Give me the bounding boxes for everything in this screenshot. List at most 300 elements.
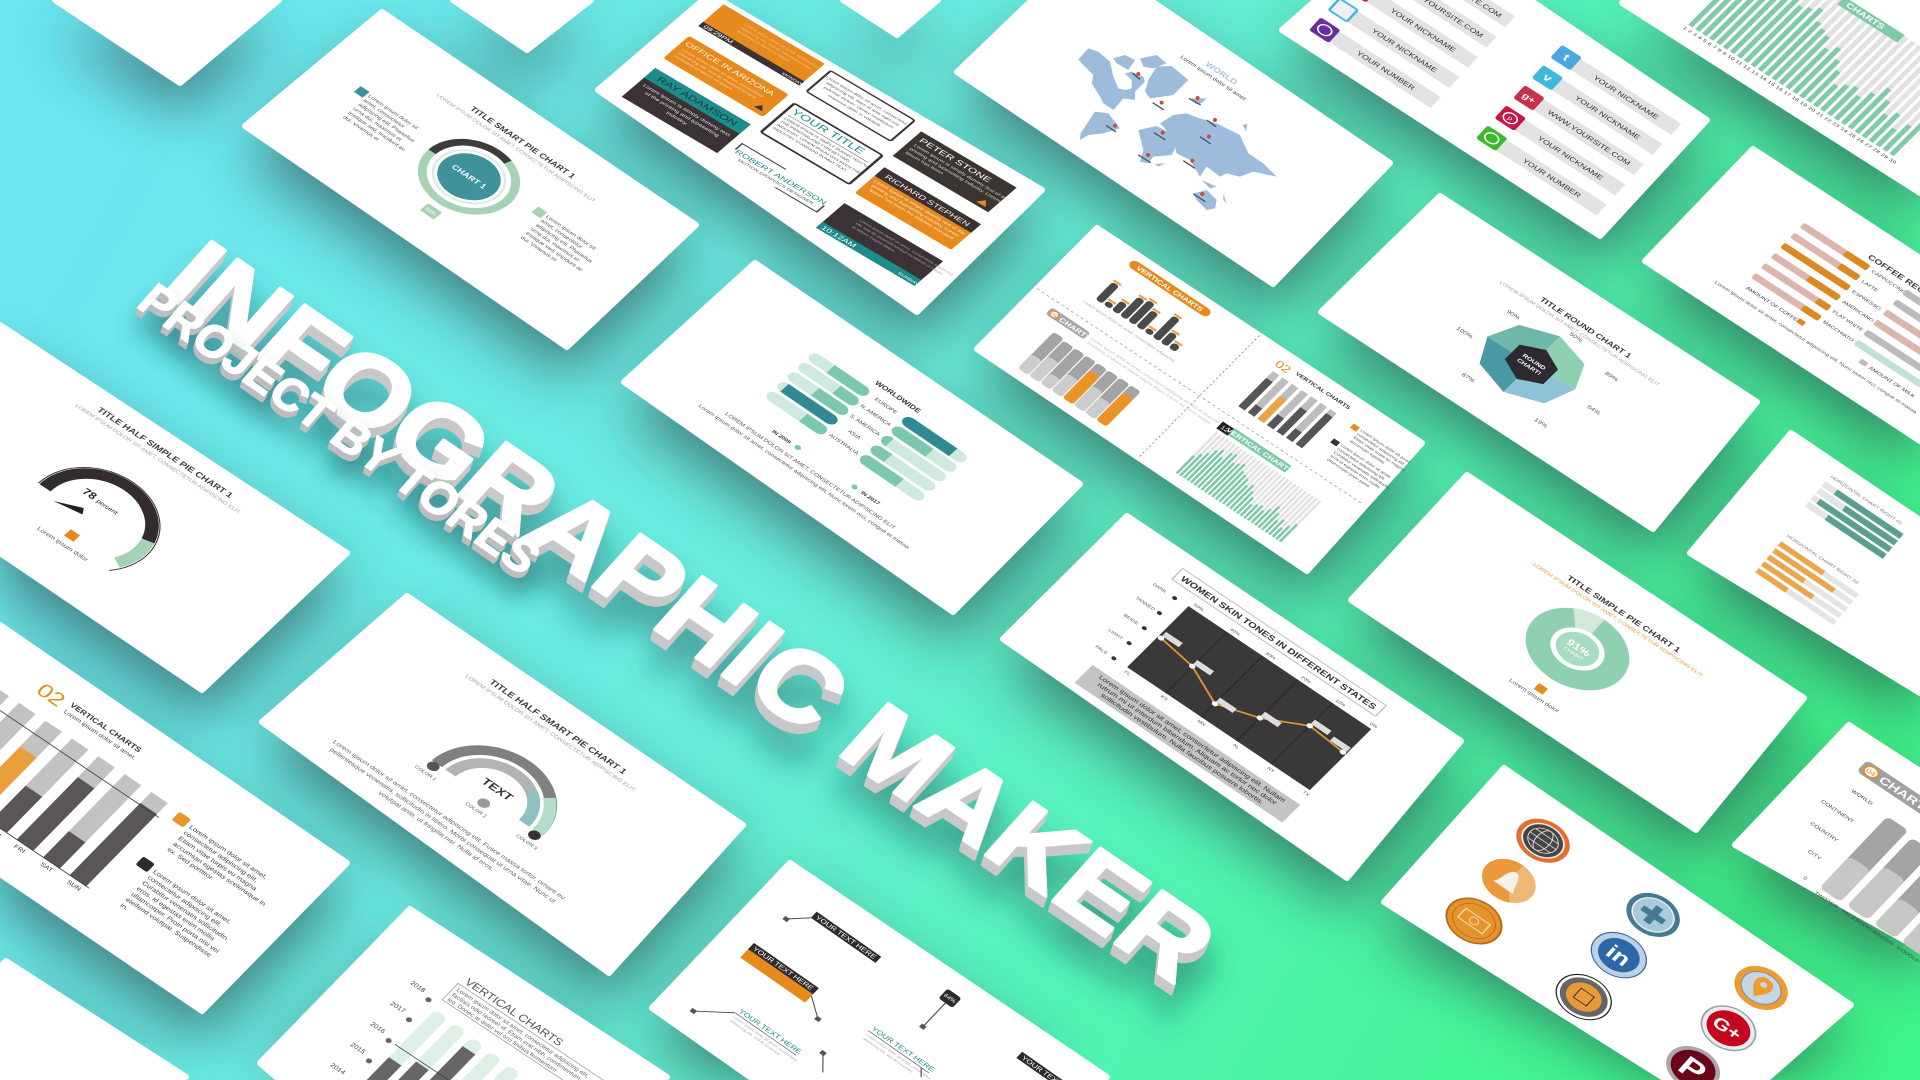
title: infographic maker: INFOGRAPHIC MAKER [143, 220, 1238, 1001]
callout: teal text 2: adipiscing elit, sed do eiusmod [862, 1036, 914, 1073]
text block left [330, 86, 428, 157]
subheading: LOREM IPSUM DOLOR SIT AMET, CONSECTETUR ADIPISCING ELIT. [463, 674, 637, 793]
contact icon: empty box [1329, 0, 1358, 22]
card: office in Arizona: incididunt ut labore et dolore [673, 54, 734, 91]
quadrant: 02 vertical charts: Curabitur venenatis sollicitudin [1333, 450, 1391, 490]
text block right [508, 207, 605, 277]
card: your title: THE PRINTING AND TYPESETTING [779, 120, 851, 163]
quadrant: 12 vertical charts [1174, 421, 1331, 542]
quadrant: 02 vertical charts: accumsan egestas [1349, 439, 1387, 465]
quadrant: 04 charts: incididunt ut labore et dolore magna aliqua ut enim ad minim veniam [1086, 341, 1212, 425]
axes labels: 40% [1228, 627, 1242, 638]
contact icon: pinterest [1494, 105, 1526, 131]
panel: round chart [1321, 196, 1757, 529]
year labels [328, 980, 427, 1076]
round chart: CHART! [1515, 358, 1542, 377]
callout: teal text 1: Lorem ipsum dolor sit amet, consectetur [732, 1015, 800, 1063]
description text: LOREM IPSUM DOLOR SIT AMET, CONSECTETUR ADIPISCING ELIT [723, 412, 897, 531]
callout: teal text 1 [728, 1007, 807, 1067]
callout: black label 1: YOUR TEXT HERE [814, 914, 878, 961]
heading: VERTICAL CHARTS [462, 976, 566, 1049]
card: your title: YOUR TITLE [789, 107, 868, 156]
subheading: Lorem ipsum dolor sit amet. [62, 709, 137, 761]
description box: Lorem ipsum dolor sit amet, consectetur adipiscing elit. Nullam [1097, 674, 1288, 804]
donut chart: CHART [1562, 646, 1584, 662]
card: quote box [807, 71, 915, 141]
panel: women skin tones chart [1003, 516, 1461, 878]
contact labels: YOUR NUMBER [1521, 157, 1583, 199]
axes labels: KS [1159, 694, 1170, 703]
axes labels: BEIGE [1122, 613, 1140, 627]
legend orange: Etiam vitae turpis eu magna [176, 836, 258, 892]
year markers [365, 996, 433, 1064]
card: Richard Stephen: RICHARD STEPHEN [883, 173, 972, 228]
panel: text flow callouts [652, 863, 1107, 1080]
card: your title: INDUSTRY. LOREM IPSUM HAS BEEN THE [776, 123, 862, 175]
card: quote box: adipiscing elit. Nam id ante eget nisi [825, 81, 901, 127]
icon: money [1436, 889, 1512, 953]
card: Richard Stephen [855, 167, 981, 250]
donut chart: 91% [1564, 638, 1592, 659]
heading: WORLD [1204, 60, 1240, 86]
panel: horizontal charts [1690, 433, 1920, 693]
card: 09:29PM: adipiscing elit, sed do eiusmod tempor [740, 26, 814, 71]
panel: blank slide bottom left [0, 961, 186, 1077]
stacked bars [0, 678, 171, 888]
region labels: N. AMERICA [859, 404, 892, 428]
text block right: urna dui, maximus et [529, 227, 581, 263]
axes labels: LIGHT [1107, 628, 1124, 641]
card: your title: LOREM IPSUM IS SIMPLY DUMMY TEXT OF [783, 117, 872, 170]
text block right: adipiscing elit. Phasellus [534, 223, 594, 264]
card: 10:12AM: SUNDAY [896, 271, 921, 287]
icon: google plus [1691, 997, 1766, 1060]
day labels [0, 772, 82, 893]
icon: globe [1506, 810, 1580, 872]
description text: Lorem ipsum dolor sit amet, consectetur adipiscing elit. Nunc lorem orci, congue et massa [697, 404, 911, 551]
heading pill [1856, 760, 1920, 841]
legend dark: in. [118, 903, 129, 912]
text block right: Lorem ipsum dolor sit [544, 215, 597, 251]
panel: coffee recipe [1645, 149, 1920, 441]
quadrant: 02 vertical charts: ullamcorper proin porta [1326, 457, 1371, 488]
description box: facilisis odio laoreet id. Etiam erat nibh, condimentum [450, 992, 582, 1080]
year labels: 2014 [328, 1062, 347, 1076]
subheading: LOREM IPSUM DOLOR SIT AMET, CONSECTETUR ADIPISCING ELIT [1531, 563, 1704, 678]
legend orange: consectetur adipiscing elit, [182, 830, 259, 884]
subheading: LOREM IPSUM DOLOR SIT AMET, CONSECTETUR ADIPISCING ELIT. [74, 404, 242, 516]
drink labels: LATTE [1860, 280, 1879, 294]
day labels: SAT [38, 862, 54, 874]
quadrant: 02 vertical charts: 02 [1272, 358, 1294, 376]
card: Richard Stephen: Ipsum has been the industry standard [868, 188, 955, 241]
gauge chart [13, 446, 187, 579]
heading box: WOMEN SKIN TONES IN DIFFERENT STATES [1178, 575, 1379, 712]
contact icon: pinterest: p [1506, 115, 1514, 122]
card: 10:12AM: et dolore magna aliqua [851, 225, 897, 253]
legend dark: ullamcorper. Proin porta nisi vel [129, 892, 221, 955]
colour keys: COLOR 2 [463, 802, 488, 819]
contact icon: twitter [1550, 45, 1582, 70]
percent labels: 19% [1532, 417, 1549, 429]
axis labels: 1 2 3 4 5 6 7 8 9 10 11 12 13 14 15 16 17 18 19 20 21 22 23 24 25 26 27 28 29 30 [1681, 26, 1897, 165]
green label: CHARTS [1844, 1, 1887, 31]
quadrant: orange vertical charts: Lorem ipsum dolor sit amet, consectetur adipiscing [1082, 299, 1177, 363]
subheading: Lorem ipsum dolor sit amet [1179, 55, 1247, 102]
callout: teal text 1: adipiscing elit, sed do eiusmod [729, 1018, 781, 1056]
quadrant: 12 vertical charts: VERTICAL CHARTS [1224, 426, 1295, 475]
x axis labels: FACEBOOK [1840, 909, 1872, 932]
panel: title smart pie chart [245, 12, 696, 347]
text block left: urna dui, maximus et [351, 107, 403, 143]
quadrant: 02 vertical charts: VERTICAL CHARTS [1294, 371, 1352, 411]
contact icon: viber [1309, 17, 1341, 43]
contact icon: whatsapp [1476, 125, 1508, 151]
caption: Lorem ipsum dolor [1507, 678, 1560, 714]
half ring gauge [437, 730, 576, 832]
percent labels: 64% [1585, 404, 1602, 416]
card: quote box: Lorem ipsum dolor sit amet, consectetur [825, 75, 909, 126]
x axis labels: TWITTER [1813, 891, 1839, 910]
legend [770, 429, 882, 506]
teal horizontal bars [1805, 481, 1904, 559]
card: Peter Stone: printing and typesetting industry. Lorem [908, 147, 1002, 204]
heading: TITLE ROUND CHART 1 [1538, 295, 1634, 360]
card: 10:12AM: elit, sed do eiusmod tempor incididunt ut labore [855, 222, 945, 276]
card: Peter Stone [893, 131, 1021, 215]
callout: 64% tag: 64% [942, 993, 957, 1005]
percentage tag: 60% [423, 207, 437, 217]
x axis labels [1813, 891, 1920, 966]
legend [1744, 285, 1917, 399]
subheading: LOREM IPSUM DOLOR SIT AMET, CONSECTETUR ADIPISCING ELIT [435, 93, 597, 204]
card: 09:29PM: 09:29PM [702, 25, 734, 45]
green label [1837, 0, 1905, 43]
panel: multi chart slide [977, 228, 1430, 571]
card: office in Arizona: adipiscing elit, sed do eiusmod tempor [677, 51, 758, 100]
round chart: ROUND [1521, 353, 1547, 372]
heading: TITLE SMART PIE CHART 1 [468, 105, 578, 180]
y axis labels [1768, 781, 1877, 881]
description box: rutrum mi ut interdum bibendum. Aliquam ac tortor nec dolor [1096, 681, 1280, 807]
heading: VERTICAL CHARTS [68, 701, 144, 754]
teal chart title: HORIZONTAL CHART RIGHT 01 [1829, 475, 1903, 526]
year labels: 2016 [368, 1021, 387, 1035]
connector 1 [782, 906, 811, 931]
subheading: LOREM IPSUM DOLOR SIT AMET, CONSECTETUR ADIPISCING ELIT [1498, 280, 1661, 388]
panel: blank slide top centre [843, 0, 938, 35]
percent labels: 50% [1567, 331, 1584, 344]
subtitle: project by tores: PROJECT BY TORES [128, 274, 551, 583]
contact labels: YOUR NUMBER [1355, 50, 1417, 92]
card: Peter Stone: Ipsum has been [904, 151, 944, 176]
panel: text cards [598, 0, 1047, 312]
donut chart: CHART 1 [450, 163, 489, 191]
percent labels: 90% [1505, 309, 1521, 321]
description box: leo. Donec at dolor vel orci finibus fermentum [445, 997, 558, 1073]
legend orange: ex. Sed porttitor. [165, 847, 215, 882]
day labels: FRI [12, 844, 26, 855]
region labels: ASIA [846, 429, 862, 441]
year labels: 2015 [348, 1042, 367, 1056]
quadrant: 04 charts: 04 [1050, 311, 1059, 319]
card: Robert Anderson: ROBERT ANDERSON [733, 148, 829, 206]
card: Ray Adamson: Lorem Ipsum is simply dummy text [641, 84, 731, 138]
heading: TITLE HALF SMART PIE CHART 1 [487, 678, 629, 776]
axes labels: DARK [1151, 582, 1168, 595]
tornado chart [764, 351, 970, 503]
icon: plus [1616, 884, 1690, 946]
card: quote box: maximus dolor in volutpat. [827, 94, 883, 128]
callout: 64% tag [938, 989, 962, 1008]
contact icon: magenta [1346, 0, 1378, 3]
y axis labels: WORLD [1850, 789, 1873, 806]
orange chart title: HORIZONTAL CHART RIGHT 02 [1785, 534, 1860, 586]
axes labels: AL [1231, 743, 1241, 750]
callout: teal text 2: Lorem ipsum dolor sit amet, consectetur [865, 1033, 933, 1080]
caption: Lorem ipsum dolor [35, 526, 90, 563]
connector 2 [799, 996, 831, 1022]
region labels: S. AMERICA [848, 414, 881, 437]
legend dark: eros, id egestas enim mollis [135, 886, 216, 942]
quadrant: 04 charts [1002, 307, 1236, 480]
panel: vertical charts left [0, 625, 347, 1011]
icon: linkedin [1581, 923, 1657, 987]
quadrant: 02 vertical charts: consectetur adipiscing elit [1336, 447, 1386, 481]
icon: linkedin: in [1601, 941, 1636, 970]
needle [54, 493, 87, 518]
panel: vertical charts bottom [260, 909, 667, 1080]
pale and dark bars [361, 1007, 525, 1080]
description box: sollicitudin vestibulum. Nulla faucibus posuere lobortis. [1099, 691, 1266, 806]
drink labels: FLAT WHITE [1831, 310, 1864, 333]
contact icon: twitter: t [1560, 52, 1573, 64]
card: Richard Stephen: printing and typesetting industry. Lorem [870, 184, 960, 238]
gauge centre text: TEXT [479, 776, 517, 803]
heading: WORLDWIDE [873, 379, 923, 415]
drink labels: MACCHIATO [1821, 320, 1855, 343]
year labels: 2017 [388, 1001, 407, 1015]
callout: orange card [740, 943, 819, 1003]
quadrant: 02 vertical charts: Lorem ipsum dolor sit amet [1359, 428, 1412, 464]
contact labels [1343, 0, 1669, 207]
legend orange [151, 812, 286, 913]
panel: blank slide top [453, 0, 591, 50]
text block left: Lorem ipsum dolor sit [366, 94, 419, 131]
contact labels: YOUR NICKNAME [1573, 94, 1642, 141]
day labels: SUN [65, 879, 82, 893]
quadrant: 04 charts: CHARTS [1057, 316, 1093, 342]
legend: IN 2009 [770, 430, 792, 445]
contact labels: WWW.YOURSITE.COM [1546, 109, 1632, 167]
percent labels [1428, 285, 1640, 446]
panel: half simple pie chart [0, 325, 347, 690]
colour keys: COLOR 1 [413, 765, 437, 782]
x axis labels: LINKEDIN [1868, 927, 1894, 947]
heading: TITLE SIMPLE PIE CHART 1 [1565, 574, 1683, 654]
axes labels: MN [1196, 719, 1207, 728]
contact icon: google plus [1513, 85, 1545, 111]
card: Ray Adamson: industry. [665, 111, 689, 127]
contact icon: vimeo [1532, 65, 1563, 91]
icon: location pin [1724, 957, 1798, 1019]
card: 10:12AM [816, 203, 959, 295]
callout: orange card: YOUR TEXT HERE [751, 945, 815, 992]
axes labels: 0% [1368, 722, 1379, 730]
axes labels: FL [1123, 670, 1132, 677]
orange horizontal bars [1755, 541, 1859, 625]
quadrant: 02 vertical charts [1235, 358, 1425, 499]
panel: blank slide top left [55, 0, 279, 83]
paragraph: pellentesque venenatis, sollicitudin in libero. Morbi consequat ut urna vitae. Nunc ut [328, 747, 557, 904]
paragraph: volutpat ante, ut fringilla nisi. Nulla id eros. [376, 790, 495, 872]
axes labels: TX [1301, 790, 1311, 798]
legend dark: Lorem ipsum dolor sit amet, [151, 869, 232, 925]
card: office in Arizona: Lorem ipsum dolor sit amet, consectetur [681, 48, 765, 99]
number: 02 [32, 679, 70, 711]
panel: simple pie chart [1351, 475, 1804, 830]
legend: IN 2017 [859, 491, 881, 506]
text block left: dui. Vivamus et [341, 115, 380, 142]
drink labels [1821, 270, 1907, 346]
card: 09:29PM: Lorem ipsum dolor sit amet, consectetur [743, 23, 821, 69]
quadrant: orange vertical charts: VERTICAL CHARTS [1134, 264, 1205, 313]
card: Ray Adamson [622, 68, 751, 153]
gauge value: 78 percent [80, 487, 122, 517]
year labels: 2018 [408, 980, 427, 994]
axes labels: PALE [1094, 645, 1109, 656]
percent labels: 89% [1603, 371, 1620, 383]
card: office in Arizona: OFFICE IN ARIZONA [683, 40, 778, 98]
panel: worldwide chart [624, 263, 1080, 612]
contact labels: YOUR NICKNAME [1389, 7, 1457, 54]
y axis labels: CONTINENT [1819, 799, 1855, 825]
y axis labels: COUNTRY [1809, 822, 1839, 843]
axes labels: 10% [1334, 698, 1347, 709]
percent labels: 100% [1455, 326, 1474, 340]
percent labels: 87% [1460, 372, 1476, 384]
region labels: AUSTRALIA [827, 433, 860, 456]
connector 4 [690, 993, 735, 1031]
text block left: tristique sed, tincidunt ac [346, 111, 406, 152]
text block right: amet, consectetur [539, 219, 584, 250]
card: your title [761, 103, 884, 185]
text block right: tristique sed, tincidunt ac [524, 231, 584, 273]
card: Peter Stone: PETER STONE [917, 137, 994, 184]
description box: Lorem ipsum dolor sit amet, consectetur adipiscing elit, [455, 987, 591, 1079]
colour keys [411, 756, 549, 853]
card: 10:12AM: 10:12AM [819, 225, 858, 249]
axes labels: TANNED [1134, 596, 1156, 612]
contact labels: YOUR NICKNAME [1370, 27, 1439, 74]
legend: AMOUNT OF MILK [1867, 366, 1916, 399]
axes labels: 30% [1264, 651, 1277, 662]
icon: bell [1472, 850, 1546, 912]
milk bars right [1853, 289, 1920, 388]
milk and coffee bars left [1751, 223, 1871, 321]
panel: world map [957, 0, 1390, 284]
panel: round icons [1384, 768, 1851, 1080]
bars [1819, 816, 1920, 956]
tag [1534, 683, 1548, 695]
legend orange: accumsan egestas scelerisque in [171, 841, 267, 908]
heading pill: 04 [1864, 767, 1878, 778]
column chart 30 values [1688, 0, 1920, 156]
text block left: adipiscing elit. Phasellus [356, 103, 416, 144]
icon: square [1546, 965, 1622, 1029]
donut chart [403, 128, 534, 226]
card: office in Arizona [663, 36, 789, 117]
y axis labels: CITY [1806, 849, 1822, 861]
world map [1078, 48, 1277, 210]
legend orange: Lorem ipsum dolor sit amet, [187, 825, 268, 881]
panel: top right green bars [1622, 0, 1920, 193]
text block right: dui. Vivamus et [519, 236, 558, 263]
card: 09:29PM: MONDAY [781, 72, 804, 86]
quadrant: 04 charts: Lorem ipsum dolor sit amet, consectetur adipiscing elit sed do eiusmod tempor [1090, 337, 1235, 434]
colour keys: COLOR 3 [514, 834, 539, 851]
axes labels: 20% [1299, 675, 1313, 685]
legend dark: Curabitur venenatis sollicitudin [140, 880, 229, 942]
callout: teal text 1: YOUR TEXT HERE [737, 1007, 803, 1056]
contact labels: YOUR NICKNAME [1592, 74, 1660, 121]
card: 10:12AM: Lorem ipsum dolor sit amet, consectetur adipiscing [858, 219, 955, 277]
contact icon: google plus: g+ [1519, 91, 1537, 106]
tag [64, 529, 80, 542]
quadrant: 12 vertical charts: 12 [1219, 425, 1230, 434]
legend dark: consectetur adipiscing elit, [146, 875, 223, 928]
card: Robert Anderson: MOTION GRAPHICS DESIGNER [736, 158, 815, 206]
icon: pinterest [1656, 1037, 1730, 1080]
card: Richard Stephen: Lorem Ipsum is simply dummy text of the [872, 179, 966, 236]
card: Ray Adamson: RAY ADAMSON [654, 75, 739, 128]
connector 3 [919, 1001, 948, 1030]
card: 09:29PM [698, 4, 826, 86]
drink labels: AMERICANO [1841, 300, 1875, 323]
text block left: amet, consectetur [361, 98, 406, 129]
card: 09:29PM: incididunt ut labore et dolore [736, 29, 792, 63]
description: Lorem ipsum dolor sit amet, consectetur adipiscing elit. Nunc lorem orci, congue et massa [1713, 280, 1918, 415]
quadrant: orange vertical charts [1082, 256, 1220, 363]
axes labels: 50% [1192, 603, 1205, 613]
contact icon: vimeo: v [1540, 71, 1555, 84]
drink labels: CAPPUCCINO [1870, 270, 1907, 295]
donut chart [1506, 591, 1649, 707]
description box [1075, 665, 1300, 823]
region labels: EUROPE [873, 397, 899, 416]
legend dark [103, 856, 245, 966]
quadrant: 02 vertical charts: eros id egestas enim mollis [1329, 454, 1382, 490]
quadrant: 02 vertical charts: consectetur adipiscing elit [1356, 432, 1406, 466]
panel: half smart pie chart [262, 596, 743, 973]
quadrant: 02 vertical charts: Lorem ipsum dolor sit amet [1340, 443, 1392, 479]
line chart [1127, 606, 1371, 790]
y axis labels: 0 [1802, 876, 1808, 881]
axes labels: NY [1266, 766, 1276, 774]
panel: social contacts [1282, 0, 1707, 236]
callout: teal text 2: YOUR TEXT HERE [870, 1025, 936, 1073]
connector 5 [810, 1019, 927, 1080]
percentage tag [420, 203, 442, 219]
card: Ray Adamson: of the printing and typesetting [643, 91, 720, 138]
legend dark: eleifend volutpat. Suspendisse [124, 897, 213, 959]
contact labels: YOUR NICKNAME [1536, 135, 1605, 181]
card: your title: INDUSTRY STANDARD DUMMY TEXT. [772, 126, 849, 172]
axes labels [1085, 577, 1379, 798]
icon: google plus: G+ [1708, 1013, 1745, 1044]
paragraph: Lorem ipsum dolor sit amet, consectetur adipiscing elit. Fusce massa tortor, ornare eu [331, 739, 567, 901]
contact bars [1329, 0, 1681, 216]
